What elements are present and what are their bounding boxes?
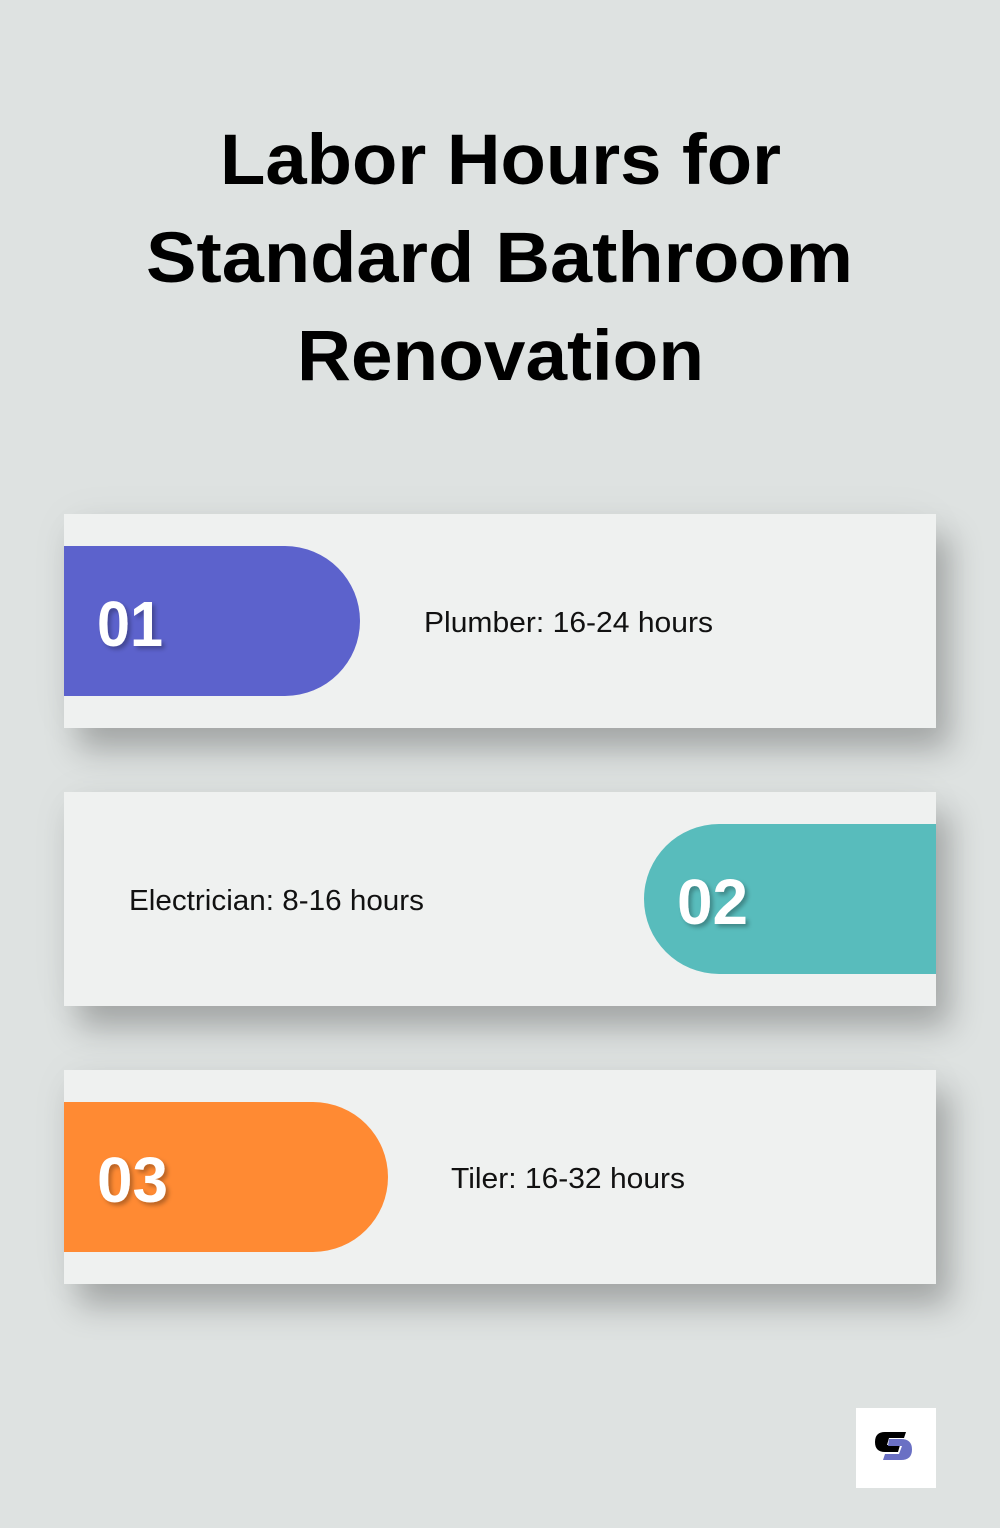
title: Labor Hours for: [220, 121, 781, 200]
badge: 02: [644, 824, 936, 974]
panel: electrician: [64, 792, 936, 1006]
icon: logo mark: [875, 1432, 912, 1460]
labels and numbers: 01: [97, 588, 163, 660]
title: Standard Bathroom: [146, 219, 853, 298]
logo: [856, 1408, 936, 1488]
panel: tiler: [64, 1070, 936, 1284]
badge: 03: [64, 1102, 388, 1252]
labels and numbers: 02: [677, 866, 748, 938]
badge: 01: [64, 546, 360, 696]
labels and numbers: Electrician: 8-16 hours: [129, 885, 424, 917]
labels and numbers: 03: [97, 1144, 168, 1216]
title: [146, 121, 853, 396]
labels and numbers: Plumber: 16-24 hours: [424, 607, 713, 639]
title: Renovation: [297, 317, 704, 396]
labels and numbers: Tiler: 16-32 hours: [451, 1163, 685, 1195]
panel: plumber: [64, 514, 936, 728]
